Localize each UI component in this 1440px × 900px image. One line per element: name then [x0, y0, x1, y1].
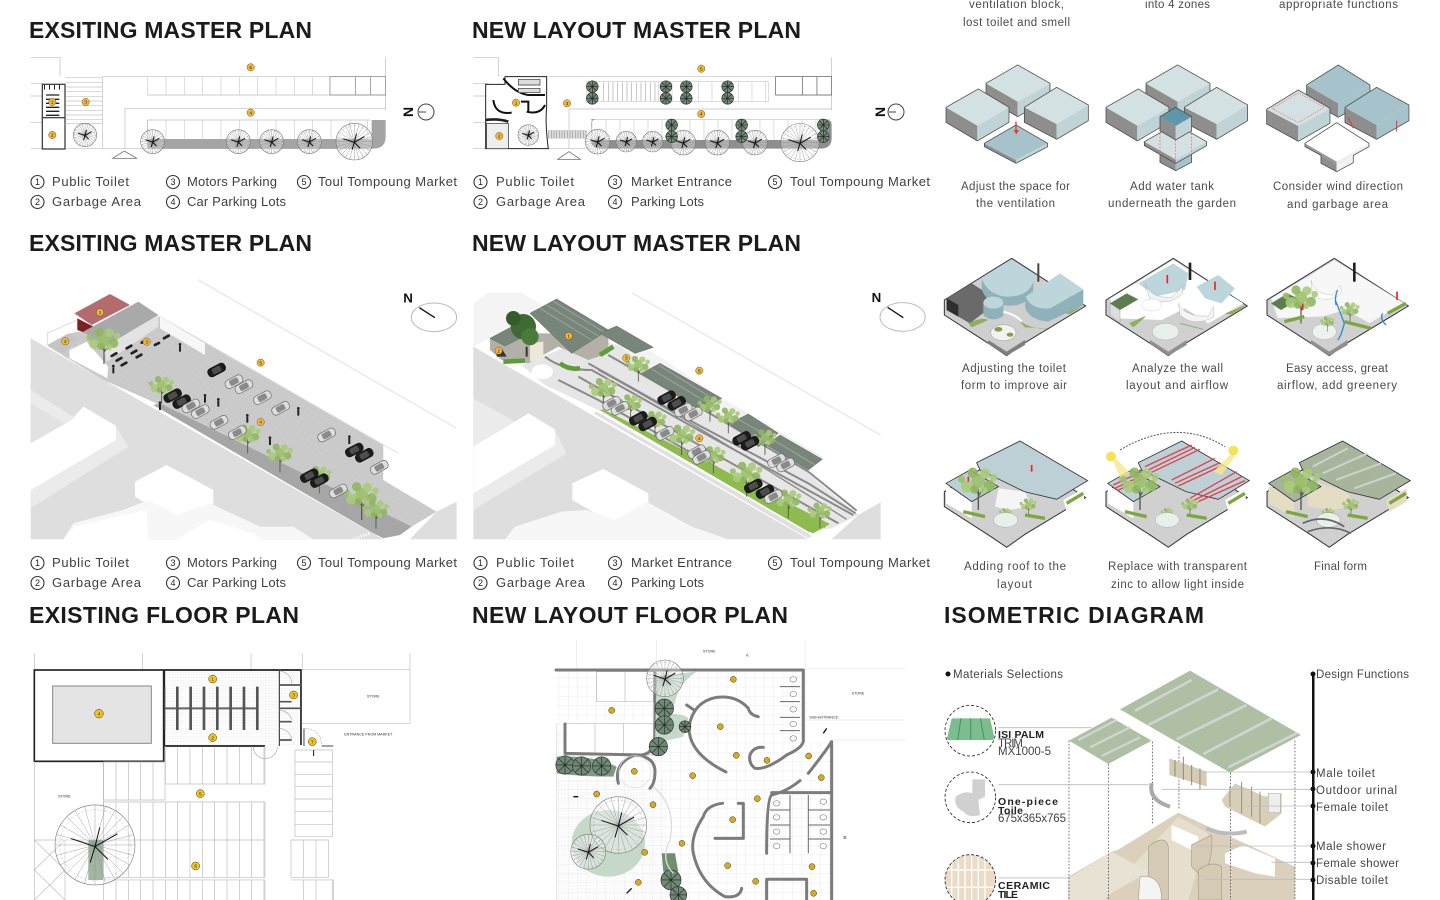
legend: existing site plan: Garbage Area	[52, 194, 142, 209]
toilet stalls	[770, 687, 830, 853]
floor plan: new layout	[556, 640, 905, 900]
curved room walls	[1138, 835, 1222, 900]
planting strip	[600, 409, 830, 533]
marker 5: 5	[249, 65, 252, 70]
heading: new layout master plan isometric: NEW LAYOUT MASTER PLAN	[472, 230, 801, 256]
legend: existing isometric: 2	[35, 578, 40, 588]
marker 5	[196, 790, 204, 798]
marker 6: 6	[194, 864, 197, 869]
legend: new site plan: 2	[478, 197, 483, 207]
design functions list: Female shower	[1316, 858, 1399, 870]
marker 1	[49, 98, 56, 106]
massing diagram: wind direction and garbage	[1267, 65, 1409, 172]
marker 4: 4	[700, 112, 703, 117]
marker 3	[143, 338, 150, 345]
legend: new isometric: Toul Tompoung Market	[790, 555, 930, 570]
trees	[589, 356, 832, 528]
compass	[403, 291, 457, 332]
marker 5	[698, 65, 705, 72]
metal roofs	[490, 299, 822, 470]
material swatch: ceramic tile	[945, 850, 996, 900]
marker 2	[495, 347, 502, 354]
design functions list: Female toilet	[1316, 802, 1389, 814]
caption: easy access	[1277, 363, 1397, 392]
grey shed roof	[83, 302, 158, 362]
legend: new isometric: Garbage Area	[496, 575, 586, 590]
caption: transparent zinc: zinc to allow light inside	[1111, 579, 1244, 591]
marker 7: 7	[311, 739, 314, 744]
marker 5	[247, 64, 254, 71]
compass	[872, 290, 925, 331]
material swatch: toilet	[945, 772, 996, 823]
legend: existing site plan: 1	[35, 177, 40, 187]
cars	[601, 389, 796, 505]
legend: existing isometric: 1	[35, 558, 40, 568]
caption: adding roof	[964, 561, 1066, 591]
marker 7	[308, 738, 316, 746]
large roof	[1120, 671, 1301, 773]
marker 4	[698, 110, 705, 118]
marker 3	[82, 98, 89, 106]
north arrow: new site plan	[872, 104, 904, 120]
legend: new isometric: Public Toilet	[496, 555, 574, 570]
paved lot	[522, 337, 858, 532]
parked cars	[162, 362, 390, 499]
marker 2	[496, 132, 503, 140]
marker 1: 1	[211, 677, 214, 682]
floor plan: new layout: STORE	[852, 692, 865, 696]
caption: easy access: airflow, add greenery	[1277, 380, 1397, 392]
legend: new site plan: 5	[772, 177, 778, 187]
legend: existing isometric: Motors Parking	[187, 555, 277, 570]
floor plan: new layout: A	[746, 653, 750, 658]
floor plan: existing	[34, 653, 410, 900]
heading: new layout floor plan: NEW LAYOUT FLOOR PLAN	[472, 602, 788, 628]
legend: existing site plan: Toul Tompoung Market	[318, 174, 457, 189]
north arrow: existing site plan: N	[400, 107, 416, 117]
legend: new isometric: 4	[612, 578, 618, 588]
legend: new isometric: 5	[772, 558, 778, 568]
heading: existing floor plan: EXISTING FLOOR PLAN	[29, 602, 299, 628]
caption: wind direction: Consider wind direction	[1273, 181, 1403, 193]
legend: new isometric: Market Entrance	[631, 555, 732, 570]
female toilet partitions	[1222, 782, 1282, 827]
caption: adjust the space: the ventilation	[976, 198, 1055, 210]
paving bands	[545, 355, 857, 527]
caption: add water tank	[1108, 181, 1236, 210]
marker 5: 5	[259, 360, 262, 365]
caption: add water tank: Add water tank	[1130, 181, 1214, 193]
iso diagram: transparent zinc	[1106, 432, 1249, 547]
legend: new site plan: 1	[478, 177, 483, 187]
legend: existing isometric: Toul Tompoung Market	[318, 555, 457, 570]
marker 5	[257, 359, 264, 366]
legend: new site plan: 3	[612, 177, 618, 187]
caption: adjust the space: Adjust the space for	[961, 181, 1070, 193]
massing diagram: add water tank	[1106, 65, 1248, 171]
toilet area	[164, 670, 301, 759]
marker 3: 3	[145, 339, 148, 344]
isometric site view: new layout	[473, 290, 925, 539]
material label: metal sheet: MX1000-5	[998, 746, 1051, 758]
design functions list: Design Functions	[1316, 669, 1409, 681]
legend: existing site plan	[31, 174, 457, 209]
legend: new isometric: 3	[612, 558, 618, 568]
heading: isometric diagram: ISOMETRIC DIAGRAM	[944, 602, 1204, 628]
material label: toilet	[998, 796, 1066, 825]
location markers	[594, 676, 824, 896]
caption: analyze wall: Analyze the wall	[1132, 363, 1223, 375]
material label: tile: CERAMIC	[998, 880, 1050, 892]
male toilet partitions	[1169, 757, 1207, 790]
legend: existing isometric: 4	[170, 578, 176, 588]
marker 1: 1	[567, 334, 570, 339]
toilet building walls	[490, 333, 608, 363]
caption: transparent zinc: Replace with transparent	[1108, 561, 1248, 573]
legend: existing site plan: 4	[170, 197, 176, 207]
marker 3: 3	[566, 101, 569, 106]
marker 2: 2	[51, 133, 54, 138]
legend: existing isometric: 3	[170, 558, 176, 568]
caption: adjust the space	[961, 181, 1070, 210]
design functions list: Male toilet	[1316, 768, 1376, 780]
site plan: existing	[31, 57, 386, 160]
tile roof	[1068, 852, 1148, 900]
toilet fixtures	[773, 677, 827, 849]
marker 1	[512, 99, 520, 106]
marker 5: 5	[199, 791, 202, 796]
floor plan: existing: STORE	[58, 794, 71, 798]
material swatch: metal sheet	[945, 705, 996, 756]
floor tile grid	[556, 672, 832, 900]
legend: new site plan: Parking Lots	[631, 194, 704, 209]
legend: new site plan	[474, 174, 930, 209]
compass: N	[403, 291, 413, 306]
leader lines	[998, 728, 1313, 879]
marker 2	[49, 131, 56, 139]
caption: analyze wall: layout and airflow	[1126, 380, 1229, 392]
compass: N	[872, 290, 881, 305]
lower walls	[1068, 813, 1295, 900]
legend: existing site plan: Public Toilet	[52, 174, 129, 189]
legend: existing site plan: Car Parking Lots	[187, 194, 286, 209]
caption: adjusting toilet	[961, 363, 1067, 392]
marker 4	[257, 418, 264, 426]
marker 1: 1	[99, 310, 102, 315]
landscape beds	[557, 672, 697, 877]
north arrow: new site plan: N	[872, 107, 888, 117]
material label: tile	[998, 880, 1050, 900]
exploded isometric diagram	[945, 671, 1313, 900]
caption: ventilation block	[963, 0, 1070, 29]
material label: toilet: Toile	[998, 805, 1023, 817]
floor plan: new layout: B	[843, 835, 847, 840]
caption: easy access: Easy access, great	[1286, 363, 1389, 375]
material label: metal sheet	[998, 729, 1051, 758]
heading: existing master plan: EXSITING MASTER PLAN	[29, 17, 312, 43]
marker 2	[62, 338, 69, 345]
marker 4: 4	[249, 110, 252, 115]
caption: add water tank: underneath the garden	[1108, 198, 1236, 210]
legend: existing site plan: 5	[301, 177, 307, 187]
marker 5: 5	[700, 66, 703, 71]
marker 1: 1	[51, 100, 54, 105]
marker 1	[565, 332, 572, 340]
marker 3: 3	[292, 693, 295, 698]
caption: adding roof: Adding roof to the	[964, 561, 1066, 573]
marker 4	[95, 709, 103, 718]
floor plan: new layout: SUB-ENTRANCE	[809, 715, 839, 719]
isometric site view: existing	[31, 280, 457, 539]
marker 2: 2	[498, 134, 501, 139]
marker 6	[192, 862, 200, 870]
small roof	[1069, 718, 1152, 764]
iso diagram: adding roof	[944, 441, 1088, 547]
design functions list	[1310, 669, 1409, 900]
marker 5	[696, 367, 703, 374]
people	[112, 343, 351, 445]
caption: wind direction	[1273, 181, 1403, 211]
legend: new site plan: Market Entrance	[631, 174, 732, 189]
legend: new site plan: Public Toilet	[496, 174, 574, 189]
design functions list: Disable toilet	[1316, 875, 1389, 887]
transparent zinc stripes	[1113, 445, 1245, 502]
floor plan: existing: STORE	[367, 694, 380, 698]
market wall	[612, 340, 808, 470]
material label: toilet: 675x365x765	[998, 813, 1066, 825]
marker 2: 2	[497, 348, 500, 353]
north arrow: existing site plan	[400, 104, 434, 120]
massing diagram: adjust space for ventilation	[946, 65, 1088, 163]
marker 3: 3	[625, 356, 628, 361]
material label: toilet: One-piece	[998, 796, 1058, 808]
marker 4: 4	[98, 711, 101, 716]
legend: new isometric	[474, 555, 930, 590]
legend: existing site plan: Motors Parking	[187, 174, 277, 189]
marker 3	[623, 354, 630, 362]
legend: existing site plan: 2	[35, 197, 40, 207]
dotted projection lines	[1069, 741, 1295, 900]
heading: new layout master plan: NEW LAYOUT MASTER PLAN	[472, 17, 801, 43]
legend: existing isometric: Public Toilet	[52, 555, 129, 570]
design functions list: Outdoor urinal	[1316, 785, 1397, 797]
caption: adding roof: layout	[997, 579, 1033, 591]
caption: analyze wall	[1126, 363, 1229, 392]
legend: existing isometric: Car Parking Lots	[187, 575, 286, 590]
marker 5: 5	[698, 368, 701, 373]
legend: new isometric: 2	[478, 578, 483, 588]
floor plan: new layout: STORE	[703, 649, 716, 653]
iso diagram: analyze wall layout	[1106, 258, 1247, 356]
marker 4: 4	[698, 436, 701, 441]
marker 1: 1	[515, 100, 518, 105]
floor plan: existing: ENTRANCE FROM MARKET	[344, 732, 393, 736]
iso diagram: adjusting toilet form	[944, 258, 1086, 356]
material label: metal sheet: TRIM	[998, 738, 1023, 750]
caption: transparent zinc	[1108, 561, 1248, 591]
caption: wind direction: and garbage area	[1287, 199, 1389, 211]
iso diagram: final form	[1267, 441, 1410, 547]
marker 4	[247, 109, 254, 116]
legend: existing isometric: Garbage Area	[52, 575, 142, 590]
marker 1	[96, 309, 104, 316]
marker 4	[696, 435, 703, 442]
curved benches	[619, 756, 651, 788]
heading: existing master plan isometric: EXSITING MASTER PLAN	[29, 230, 312, 256]
caption: ventilation block: lost toilet and smell	[963, 17, 1070, 29]
red existing toilet roof	[74, 294, 130, 334]
legend: new isometric: Parking Lots	[631, 575, 704, 590]
legend: new site plan: 4	[612, 197, 618, 207]
legend: existing site plan: 3	[170, 177, 176, 187]
marker 2	[209, 734, 217, 742]
marker 2: 2	[64, 339, 67, 344]
caption: adjusting toilet: form to improve air	[961, 380, 1067, 392]
large tree	[506, 311, 539, 357]
marker 3	[563, 100, 571, 107]
legend: existing isometric: 5	[301, 558, 307, 568]
marker 3: 3	[84, 100, 87, 105]
legend: new site plan: Garbage Area	[496, 194, 586, 209]
legend: new site plan: Toul Tompoung Market	[790, 174, 930, 189]
caption: adjusting toilet: Adjusting the toilet	[962, 363, 1067, 375]
material label: metal sheet: ISI PALM	[998, 729, 1044, 741]
marker 3	[290, 691, 298, 699]
caption: final form: Final form	[1314, 561, 1367, 573]
parked motorbikes	[112, 336, 169, 365]
legend: existing isometric	[31, 555, 457, 590]
outdoor urinal	[1151, 783, 1170, 807]
street tree	[55, 805, 135, 885]
iso diagram: easy access and greenery	[1267, 258, 1408, 356]
design functions list: Male shower	[1316, 841, 1386, 853]
site plan: new layout	[473, 57, 832, 162]
materials heading: Materials Selections	[953, 669, 1063, 681]
legend: new isometric: 1	[478, 558, 483, 568]
walls	[556, 670, 832, 900]
marker 1	[209, 675, 217, 683]
marker 4: 4	[259, 420, 262, 425]
marker 2: 2	[211, 735, 214, 740]
sun path and light	[1106, 432, 1238, 477]
